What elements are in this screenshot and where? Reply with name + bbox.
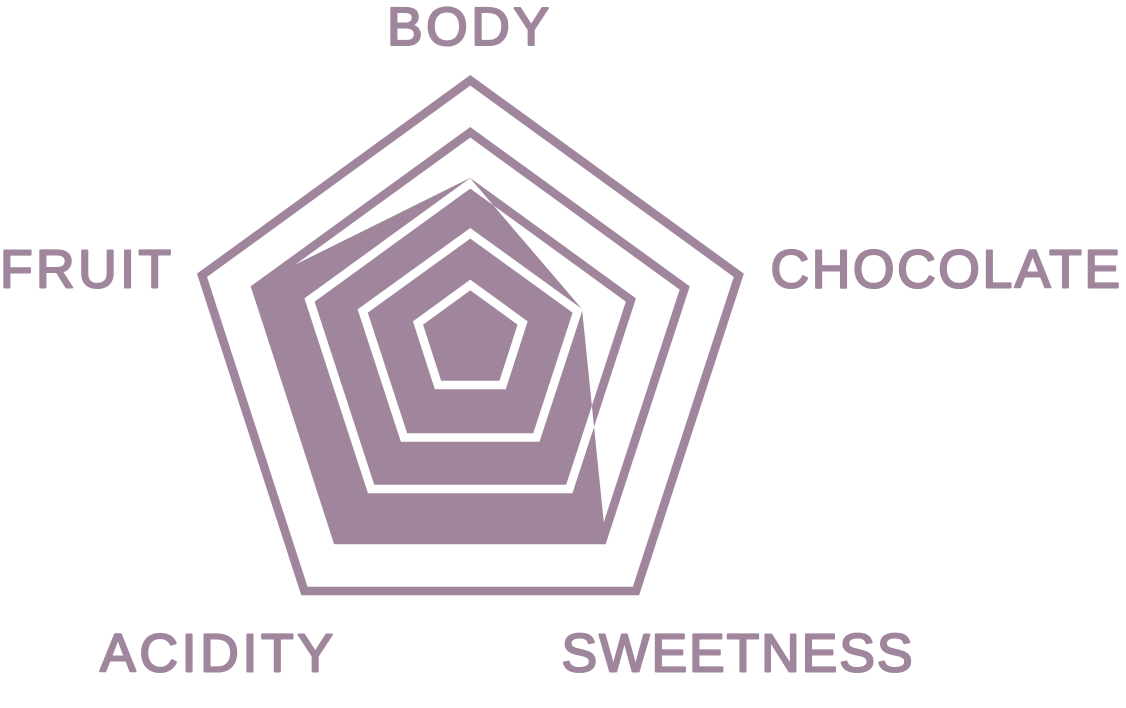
radar grid rings [202,80,739,591]
label: sweetness: SWEETNESS [562,624,912,684]
label: fruit: FRUIT [0,240,171,300]
label: acidity: ACIDITY [100,624,333,684]
label: chocolate: CHOCOLATE [770,240,1120,300]
data polygon [251,178,606,544]
inner rings knocked out of the data polygon [310,183,631,489]
